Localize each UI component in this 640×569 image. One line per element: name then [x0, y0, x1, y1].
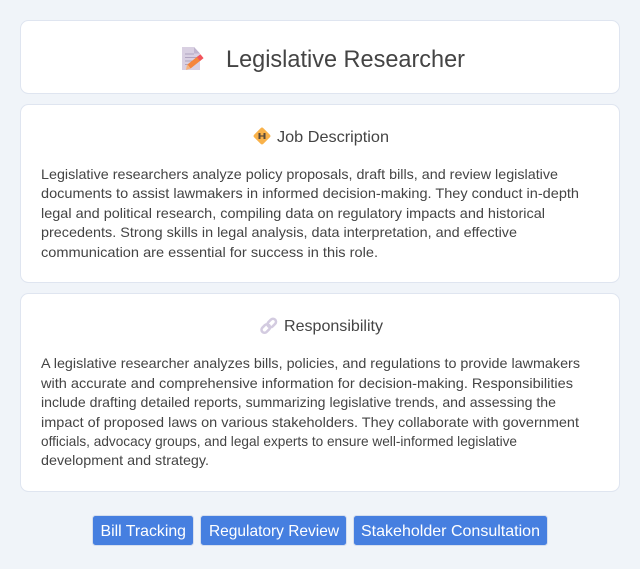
heading: Legislative Researcher: Legislative Researcher [226, 46, 465, 73]
tag: Stakeholder Consultation: Stakeholder Consultation [361, 523, 540, 540]
tag: Bill Tracking [92, 516, 194, 546]
tags row [92, 516, 548, 546]
text block: job description body [41, 166, 579, 260]
icon: chain link [260, 318, 277, 334]
icon: orange diamond sign [253, 127, 271, 145]
tag: Bill Tracking: Bill Tracking [100, 523, 186, 540]
heading: Responsibility: Responsibility [284, 318, 383, 335]
heading: Job Description: Job Description [277, 129, 389, 146]
text block: responsibility body [40, 355, 580, 468]
text block: job description body: Legislative researchers analyze policy proposals, draft bills, and review legislative [41, 166, 558, 182]
tag: Regulatory Review [200, 516, 346, 546]
text block: responsibility body: A legislative researcher analyzes bills, policies, and regulations to provide lawmakers [41, 355, 580, 371]
text block: job description body: documents to assist lawmakers in informed decision-making. They conduct in-depth [41, 185, 579, 201]
panel: responsibility [20, 294, 620, 492]
panel: job description [20, 104, 620, 282]
icon: document with pencil [182, 47, 202, 70]
text block: responsibility body: with accurate and comprehensive information for decision-making. Responsibilities [40, 375, 573, 391]
tag: Regulatory Review: Regulatory Review [209, 523, 339, 540]
text block: job description body: communication are essential for success in this role. [41, 244, 378, 260]
text block: job description body: precedents. Strong skills in legal analysis, data interpretation, and effective [41, 224, 517, 240]
text block: responsibility body: officials, advocacy groups, and legal experts to ensure well-informed legislative [41, 433, 517, 449]
text block: responsibility body: impact of proposed laws on various stakeholders. They collaborate with government [41, 414, 579, 430]
text block: job description body: legal and political research, compiling data on regulatory impacts and historical [41, 205, 545, 221]
tag: Stakeholder Consultation [354, 516, 548, 546]
text block: responsibility body: include drafting detailed reports, summarizing legislative trends, and assessing the [41, 394, 556, 410]
panel: title [20, 20, 620, 94]
text block: responsibility body: development and strategy. [41, 452, 209, 468]
